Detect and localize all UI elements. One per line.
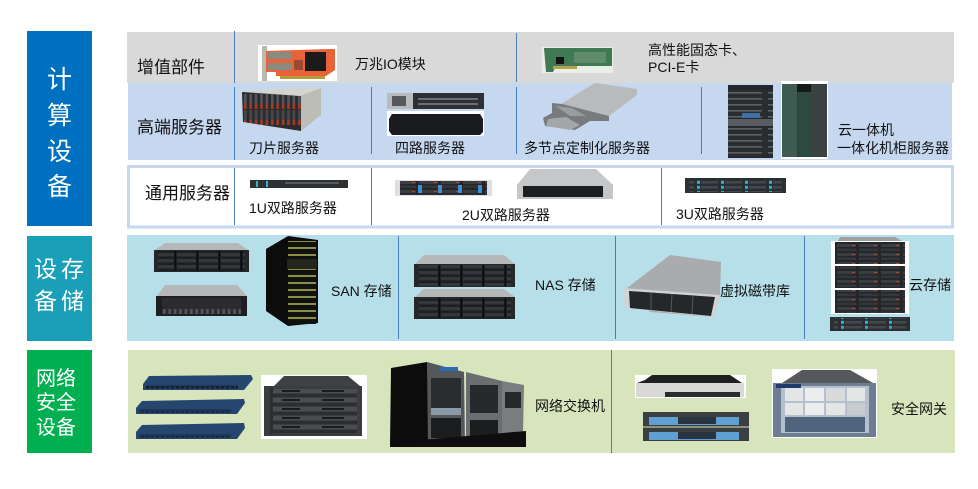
icon: cloud rack [728,85,773,158]
label: 高性能固态卡: PCI-E卡 [648,59,699,75]
icon: switch 3 [136,423,245,439]
label: 3U双路服务器: 3U双路服务器 [676,206,764,222]
icon: security gateway chassis [772,369,877,438]
category: 计算设备: 计 [47,66,72,94]
label: 安全网关: 安全网关 [891,401,947,417]
category: 计算设备 [27,31,92,226]
icon: SSD card [542,47,613,73]
category: 存储设备: 储 [61,288,84,314]
icon: SAN array bottom [156,285,247,316]
label: 四路服务器: 四路服务器 [395,140,465,156]
label: 2U双路服务器: 2U双路服务器 [462,207,550,223]
panel: 增值部件 [127,31,954,83]
label: 云一体机: 云一体机 [838,122,894,138]
panel: 网络安全设备 [128,350,955,453]
panel: 存储设备 [127,235,954,341]
icon: 四路 server [387,93,484,136]
icon: virtual tape library [623,255,721,317]
label: 多节点定制化服务器: 多节点定制化服务器 [524,140,650,156]
category: 网络安全设备 [27,350,92,453]
icon: switch 1 [143,375,253,390]
category: 计算设备: 算 [47,102,72,130]
icon: large core switches [390,362,526,447]
category: 存储设备: 备 [34,288,57,314]
heading: 增值部件: 增值部件 [137,58,205,77]
category: 网络安全设备: 网络 [36,367,76,390]
icon: SAN tower [266,236,318,326]
panel: 通用服务器 [128,166,952,227]
icon: cloud storage [830,237,910,331]
label: 云存储: 云存储 [909,277,951,293]
icon: 万兆IO card [258,45,337,81]
icon: 2U server [395,180,492,196]
category: 计算设备: 备 [47,173,72,201]
heading: 高端服务器: 高端服务器 [137,118,222,137]
label: 网络交换机: 网络交换机 [535,398,605,414]
icon: switch 2 [136,399,245,414]
label: NAS 存储: NAS 存储 [535,277,596,293]
category: 存储设备: 存 [61,256,84,282]
icon: 2U server, front bays [517,169,613,199]
icon: NAS array top [414,255,515,287]
label: 1U双路服务器: 1U双路服务器 [249,200,337,216]
icon: 3U server [685,178,786,193]
icon: SAN array top [154,243,249,272]
label: 虚拟磁带库: 虚拟磁带库 [720,283,790,299]
label: SAN 存储: SAN 存储 [331,283,392,299]
icon: chassis switch [261,375,367,439]
icon: NAS array bottom [414,289,515,319]
icon: security appliance pair [643,412,749,441]
icon: security appliance 1U [635,375,746,398]
heading: 通用服务器: 通用服务器 [145,184,230,203]
category: 存储设备 [27,236,92,341]
label: 万兆IO模块: 万兆IO模块 [355,56,426,72]
icon: 多节点 server [543,83,637,130]
label: 高性能固态卡: 高性能固态卡、 [648,42,746,58]
category: 存储设备: 设 [34,256,57,282]
icon: 1U server [250,180,348,188]
label: 刀片服务器: 刀片服务器 [249,140,319,156]
label: 云一体机: 一体化机柜服务器 [837,140,949,156]
category: 网络安全设备: 设备 [36,416,76,439]
icon: integrated cabinet [781,81,828,159]
category: 网络安全设备: 安全 [36,391,76,414]
icon: blade server [242,88,321,131]
category: 计算设备: 设 [47,138,72,166]
panel: 高端服务器 [128,81,952,160]
